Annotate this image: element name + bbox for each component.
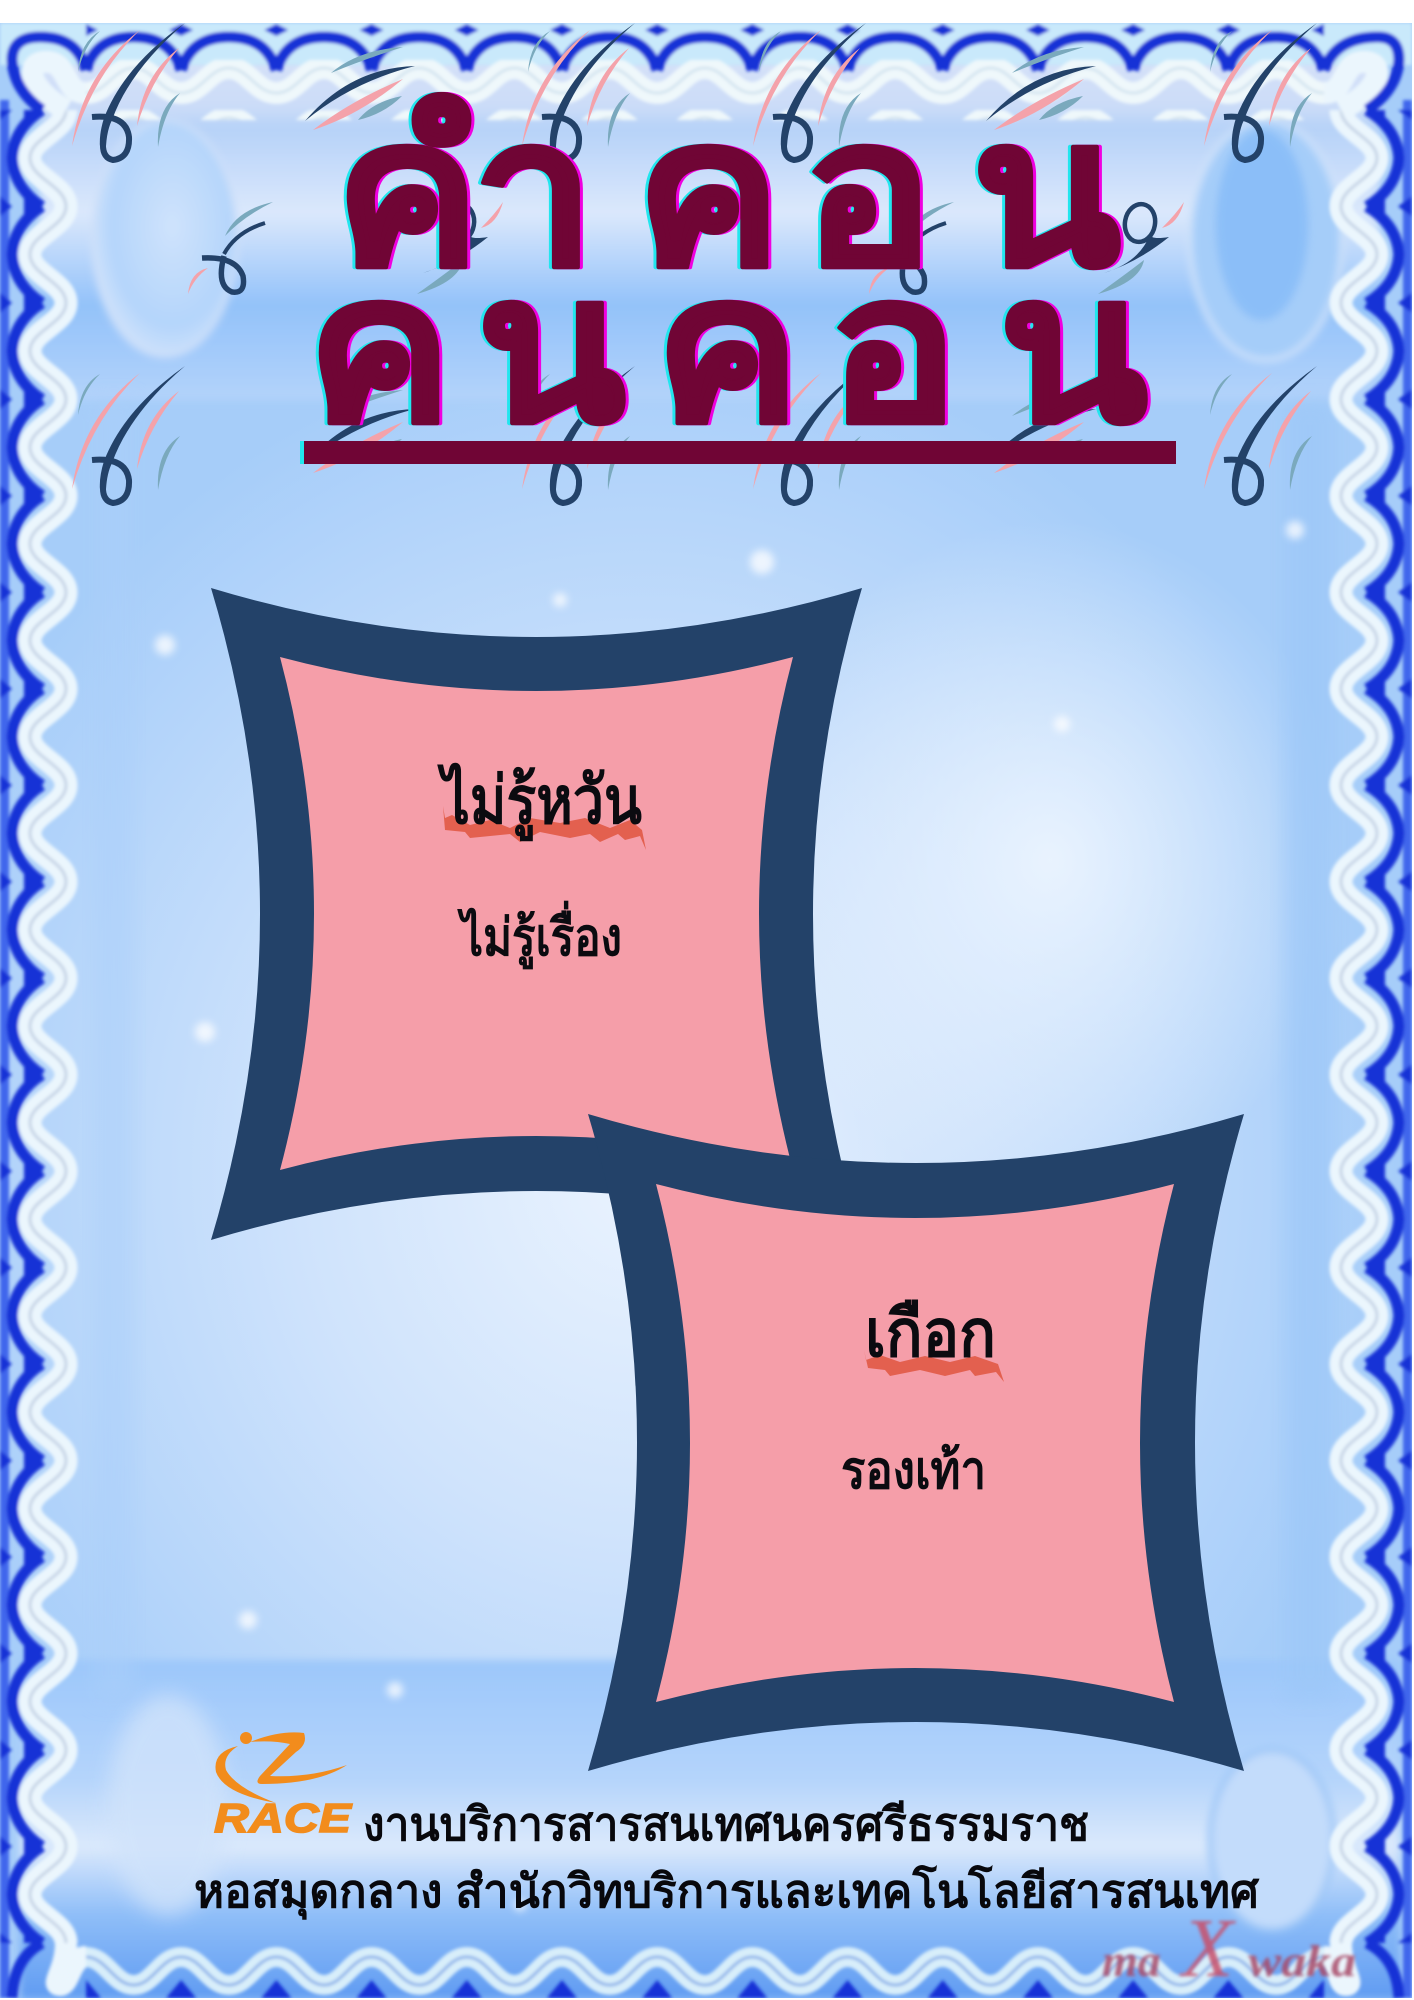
sparkle dots bbox=[155, 521, 1304, 1911]
logo: RACE bbox=[214, 1732, 353, 1841]
title line 2: คนคอน bbox=[307, 235, 1148, 464]
small motif, right side bbox=[1098, 202, 1184, 294]
watermark: X bbox=[1179, 1902, 1237, 1995]
panel fill 1 bbox=[280, 657, 793, 1170]
meaning: ไม่รู้เรื่อง: ไม่รู้เรื่อง bbox=[457, 901, 622, 970]
scroll end cap: top right bbox=[1190, 120, 1342, 360]
title line 2: คนคอน bbox=[304, 235, 1145, 464]
title line 1: คำคอน bbox=[335, 79, 1121, 308]
scroll end cap: bottom right bbox=[1210, 1750, 1334, 1930]
scroll end cap: bottom left bbox=[108, 1695, 228, 1915]
panel fill 2 bbox=[656, 1184, 1174, 1702]
side shading bbox=[94, 400, 134, 1700]
meaning: รองเท้า: รองเท้า bbox=[841, 1442, 986, 1500]
brush underline 1 bbox=[443, 806, 646, 850]
footer text bbox=[194, 1798, 1260, 1920]
title underline bbox=[300, 441, 1176, 464]
footer line 1: งานบริการสารสนเทศนครศรีธรรมราช bbox=[363, 1798, 1089, 1850]
logo: RACE: RACE bbox=[214, 1795, 353, 1841]
watermark: waka bbox=[1248, 1937, 1356, 1986]
title line 1: คำคอน bbox=[332, 79, 1118, 308]
title line 2: คนคอน bbox=[310, 235, 1151, 464]
central glow bbox=[750, 520, 1350, 1200]
watermark: ma bbox=[1102, 1935, 1161, 1986]
panel: ไม่รู้หวัน bbox=[211, 588, 862, 1240]
watermark bbox=[1102, 1902, 1356, 1995]
term: ไม่รู้หวัน: ไม่รู้หวัน bbox=[437, 762, 642, 842]
footer line 2: หอสมุดกลาง สำนักวิทบริการและเทคโนโลยีสารสนเทศ bbox=[194, 1864, 1260, 1920]
brush underline 2 bbox=[864, 1350, 1004, 1382]
term: เกือก: เกือก bbox=[865, 1296, 996, 1370]
bottom scroll roll bbox=[20, 1660, 1400, 1999]
title line 1: คำคอน bbox=[338, 79, 1124, 308]
panel frame 1 bbox=[211, 588, 862, 1240]
decorative hair-stroke motifs bbox=[72, 23, 1317, 503]
top scroll roll bbox=[40, 60, 1380, 400]
title bbox=[300, 79, 1176, 464]
small motif, left bbox=[188, 202, 273, 294]
panel: เกือก bbox=[588, 1114, 1244, 1771]
scroll end cap: top left bbox=[93, 120, 237, 356]
panel frame 2 bbox=[588, 1114, 1244, 1771]
